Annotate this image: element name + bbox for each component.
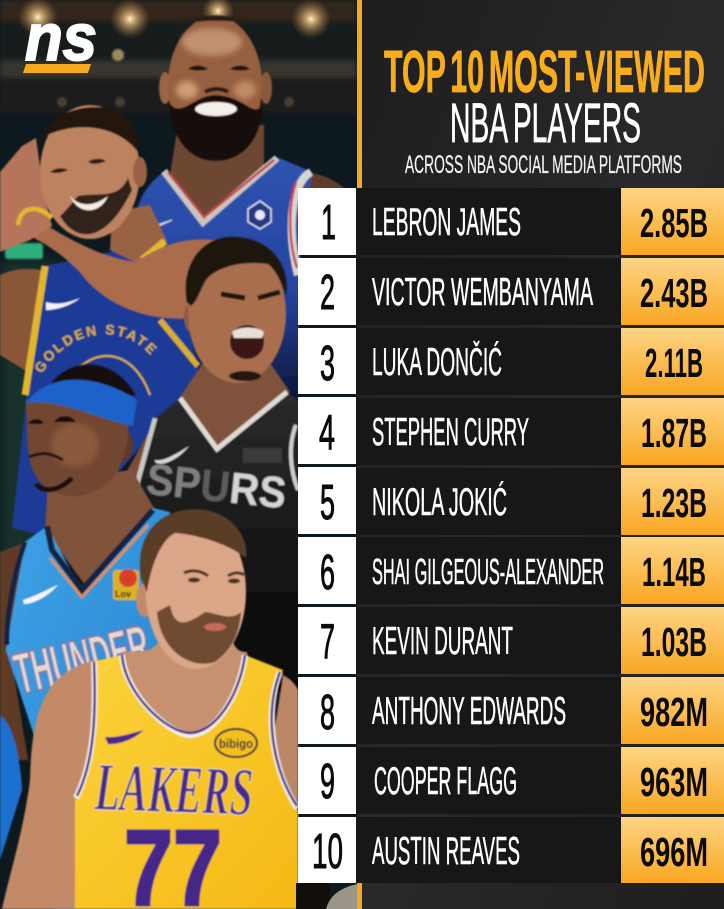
row 8 xyxy=(298,677,724,744)
row 7: KEVIN DURANT xyxy=(372,620,513,663)
row 6 xyxy=(298,537,724,604)
player: Shai Gilgeous-Alexander xyxy=(0,364,175,909)
player: Shai Gilgeous-Alexander: Lov xyxy=(115,589,131,599)
row 2: 2 xyxy=(320,266,335,320)
player: Victor Wembanyama: SPURS xyxy=(144,455,289,518)
row 5 xyxy=(298,467,724,535)
photo background: arena xyxy=(0,0,357,909)
photo foot: bottom corner xyxy=(296,883,357,909)
player: Stephen Curry xyxy=(0,104,216,534)
row 5: 5 xyxy=(320,476,335,530)
title xyxy=(384,39,705,179)
logo: NS: ns xyxy=(25,0,97,74)
ranking table xyxy=(298,188,724,883)
row 2 xyxy=(298,258,724,325)
row 1: 1 xyxy=(321,196,336,250)
row 4 xyxy=(298,397,724,465)
row 9: 9 xyxy=(320,755,335,809)
row 5: NIKOLA JOKIĆ xyxy=(372,481,507,524)
row 4: 4 xyxy=(319,406,335,460)
row 3: 3 xyxy=(320,337,335,391)
player: Luka Doncic: LAKERS xyxy=(93,748,254,830)
row 3 xyxy=(298,328,724,395)
row 4: STEPHEN CURRY xyxy=(372,411,529,454)
player: Luka Doncic xyxy=(2,509,298,909)
player: Victor Wembanyama xyxy=(122,237,298,700)
row 9 xyxy=(298,747,724,814)
row 9: COOPER FLAGG xyxy=(374,760,517,803)
row 7 xyxy=(298,607,724,674)
gold divider: bottom xyxy=(357,883,362,909)
player: Luka Doncic: bibigo xyxy=(219,736,253,751)
panel: right dark background xyxy=(357,0,724,909)
row 10: AUSTIN REAVES xyxy=(372,830,520,873)
player: Stephen Curry: GOLDEN STATE xyxy=(34,323,158,373)
row 6: 6 xyxy=(320,546,335,600)
row 10: 10 xyxy=(312,825,343,879)
player: Shai Gilgeous-Alexander: THUNDER xyxy=(8,613,156,707)
row 7: 7 xyxy=(320,615,335,669)
row 3: LUKA DONČIĆ xyxy=(372,340,502,384)
row 1: LEBRON JAMES xyxy=(372,201,521,244)
row 10 xyxy=(298,817,724,883)
player: LeBron James xyxy=(137,16,346,400)
row 1 xyxy=(298,188,724,255)
row 8: 8 xyxy=(320,686,335,740)
gold divider: top xyxy=(357,0,362,188)
